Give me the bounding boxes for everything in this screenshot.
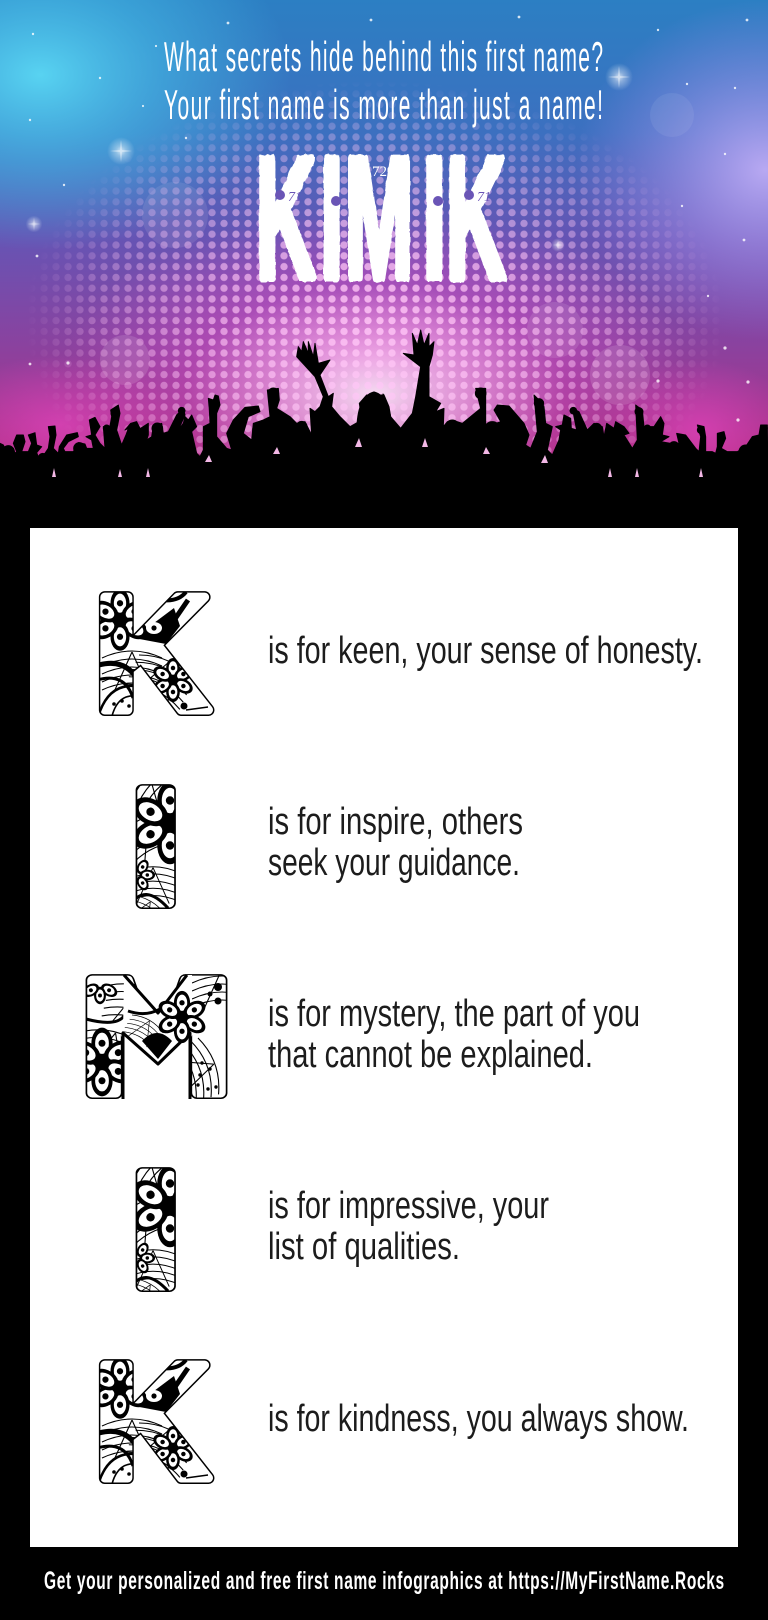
heading: Your first name is more than just a name! [164, 82, 603, 129]
stars [26, 16, 750, 422]
text: impressive: is for impressive, your [268, 1185, 549, 1227]
text: inspire [268, 801, 523, 884]
icon: zentangle letter K: K [94, 563, 210, 745]
heading [164, 34, 603, 129]
row 4: I [118, 1130, 549, 1322]
icon: zentangle letter I: I [130, 1139, 181, 1322]
text: impressive: list of qualities. [268, 1226, 460, 1268]
background: concert stage [0, 0, 768, 456]
icon: zentangle letter M [86, 974, 228, 1099]
icon: zentangle letter I [136, 1167, 176, 1292]
heading: What secrets hide behind this first name? [164, 34, 603, 81]
icon: zentangle letter K [98, 591, 214, 716]
name title: KIMIK: 729 [372, 164, 394, 180]
text: mystery: that cannot be explained. [268, 1034, 593, 1076]
text: mystery [268, 993, 640, 1076]
text: inspire: is for inspire, others [268, 801, 523, 843]
white panel [30, 528, 738, 1547]
name title: KIMIK: 71 [477, 190, 491, 205]
row 5: K [98, 1359, 686, 1484]
icon: zentangle letter M: M [80, 944, 233, 1128]
row 2: I [118, 747, 523, 939]
crowd gaps [52, 438, 703, 477]
text: impressive [268, 1185, 549, 1268]
icon: zentangle letter I: I [130, 756, 181, 939]
crowd silhouette [0, 330, 768, 530]
icon: zentangle letter K [98, 1359, 214, 1484]
footer: Get your personalized and free first name infographics at https://MyFirstName.Rocks [44, 1567, 724, 1595]
text: inspire: seek your guidance. [268, 842, 520, 884]
row 1: K [84, 540, 703, 745]
row 3: M [67, 944, 640, 1128]
icon: zentangle letter I [136, 784, 176, 909]
M centre V band [122, 975, 209, 1103]
page frame [0, 528, 768, 1620]
name title: KIMIK: 71 [288, 190, 302, 205]
text: mystery: is for mystery, the part of you [268, 993, 640, 1035]
icon: zentangle letter K: K [94, 1331, 210, 1513]
name title: KIMIK: KIMIK [256, 122, 506, 314]
